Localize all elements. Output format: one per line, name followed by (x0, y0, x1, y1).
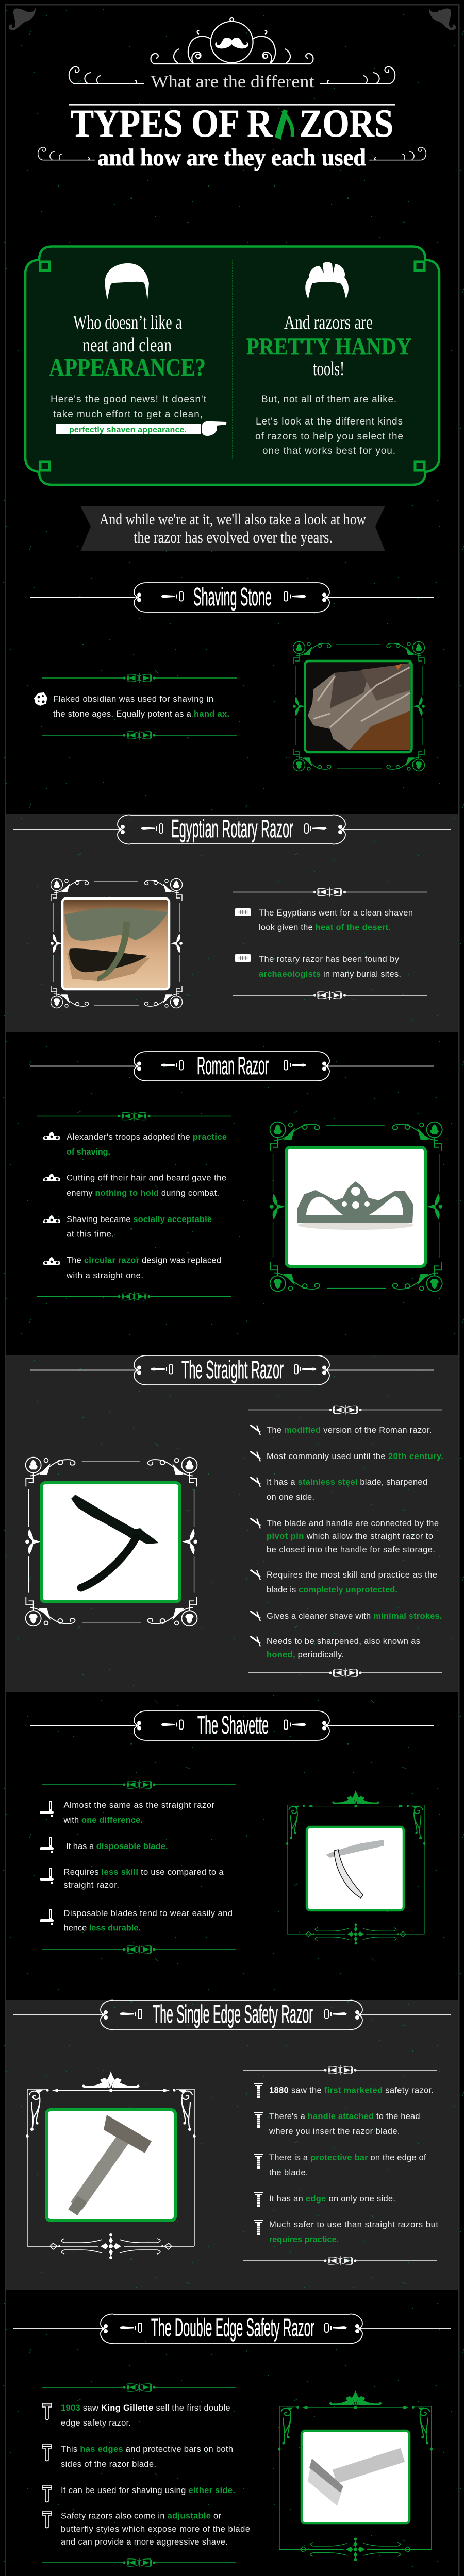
heading (30, 583, 434, 612)
icon: screw (254, 2112, 263, 2128)
banner: the razor has evolved over the years. (134, 528, 333, 546)
text panel: It has a disposable blade. (66, 1842, 168, 1851)
panel: intro (25, 246, 439, 485)
heading (13, 2314, 451, 2343)
icon: screw (254, 2220, 263, 2235)
heading: And razors are (284, 312, 373, 333)
text panel: There is a protective bar on the edge of (269, 2153, 426, 2162)
main title: ZORS (300, 102, 393, 145)
icon: roman razor (43, 1174, 60, 1181)
right column: of razors to help you select the (255, 431, 403, 442)
icon: double edge razor (42, 2403, 52, 2419)
icon: blade (235, 954, 251, 962)
text panel: be closed into the handle for safe storage. (267, 1545, 435, 1554)
text panel: The modified version of the Roman razor. (267, 1426, 432, 1435)
left column: APPEARANCE? (49, 353, 206, 381)
text panel (243, 2065, 438, 2265)
right column: tools! (313, 358, 344, 380)
section: straight razor (26, 1355, 443, 1677)
text panel: The circular razor design was replaced (67, 1256, 221, 1265)
icon: straight razor (250, 1518, 261, 1529)
section: egyptian rotary razor (13, 815, 451, 1008)
icon: straight razor (250, 1611, 261, 1621)
image: obsidian (293, 642, 425, 771)
text panel: Much safer to use than straight razors but (269, 2220, 438, 2229)
text panel: This has edges and protective bars on both (61, 2445, 233, 2454)
text panel: of shaving. (67, 1147, 110, 1157)
heading: Egyptian Rotary Razor (171, 815, 293, 843)
text panel: Safety razors also come in adjustable or (61, 2511, 222, 2520)
text panel: Alexander's troops adopted the practice (67, 1132, 227, 1142)
text panel: and can provide a more aggressive shave. (61, 2537, 228, 2547)
section: single edge safety razor (13, 2000, 451, 2265)
text panel (42, 2383, 250, 2567)
icon: straight razor (250, 1425, 261, 1435)
icon: hair (105, 263, 149, 300)
title rule (69, 104, 395, 106)
title line 1 flourishes (69, 67, 395, 84)
heading (30, 1711, 434, 1740)
icon: roman razor (43, 1257, 60, 1265)
text panel: butterfly styles which expose more of the blade (61, 2524, 250, 2534)
text panel: where you insert the razor blade. (269, 2127, 400, 2136)
text panel: requires practice. (269, 2235, 339, 2244)
icon: roman razor (43, 1215, 60, 1223)
icon: pompadour hair (305, 262, 349, 299)
text panel: It has an edge on only one side. (269, 2194, 395, 2204)
text panel: The blade and handle are connected by the (267, 1519, 439, 1528)
text panel: at this time. (67, 1229, 114, 1239)
icon: straight razor (250, 1569, 261, 1580)
main title: TYPES OF R (71, 102, 273, 145)
text panel (40, 1780, 236, 1954)
icon: straight razor (250, 1636, 261, 1647)
section: shavette (30, 1711, 434, 1954)
text panel: with a straight one. (66, 1271, 143, 1280)
image: double edge razor (278, 2390, 433, 2561)
text panel: The Egyptians went for a clean shaven (259, 908, 413, 918)
text panel: Gives a cleaner shave with minimal strokes. (267, 1612, 442, 1621)
icon: double edge razor (42, 2445, 52, 2461)
text panel: There's a handle attached to the head (269, 2112, 420, 2121)
title line 3 flourishes (38, 147, 426, 160)
text panel: Requires the most skill and practice as the (267, 1570, 437, 1580)
text panel: sides of the razor blade. (61, 2460, 156, 2469)
left column: take much effort to get a clean, (53, 409, 203, 420)
heading (30, 1355, 434, 1385)
text panel: Flaked obsidian was used for shaving in (53, 694, 213, 704)
section: double edge safety razor (13, 2314, 451, 2567)
text panel (37, 1112, 231, 1301)
text panel: the blade. (269, 2168, 308, 2177)
title line 1: What are the different (151, 73, 314, 91)
image: single edge razor (26, 2071, 196, 2259)
icon: screw (254, 2083, 263, 2098)
text panel: look given the heat of the desert. (259, 923, 391, 933)
text panel: Cutting off their hair and beard gave the (67, 1174, 226, 1183)
heading (13, 2000, 451, 2030)
text panel: on one side. (267, 1493, 314, 1502)
text panel (34, 673, 237, 740)
icon: straight razor (250, 1451, 261, 1462)
heading: Shaving Stone (193, 583, 272, 611)
body: Here's the good news! It doesn't (51, 394, 207, 405)
image: shavette (286, 1790, 425, 1944)
alternating section bands (5, 814, 459, 2576)
icon: shavette (40, 1837, 54, 1853)
text panel: straight razor. (64, 1880, 119, 1890)
body: But, not all of them are alike. (261, 394, 396, 405)
highlight (56, 424, 201, 434)
text panel: Almost the same as the straight razor (64, 1801, 214, 1810)
text panel: Disposable blades tend to wear easily and (64, 1909, 233, 1918)
text panel: archaeologists in many burial sites. (259, 970, 401, 979)
icon: blade (235, 908, 251, 916)
text panel: hence less durable. (64, 1924, 141, 1933)
icon: double edge razor (42, 2486, 52, 2502)
icon: shavette (40, 1909, 54, 1925)
text panel: blade is completely unprotected. (267, 1585, 397, 1595)
text panel: The rotary razor has been found by (259, 955, 400, 964)
right column (246, 262, 411, 456)
icon: shavette (40, 1868, 54, 1884)
icon: shavette (40, 1801, 54, 1817)
icon: double edge razor (42, 2512, 52, 2528)
heading: Roman Razor (197, 1052, 269, 1080)
heading (13, 815, 451, 844)
text panel: 1880 saw the first marketed safety razor. (269, 2086, 434, 2095)
image: bronze razor (51, 879, 183, 1008)
text panel: honed, periodically. (267, 1650, 344, 1659)
icon: roman razor (43, 1132, 60, 1140)
banner (80, 506, 385, 551)
section: roman razor (30, 1052, 442, 1301)
text panel (233, 887, 427, 1000)
text panel: It can be used for shaving using either side. (61, 2486, 235, 2495)
left column: neat and clean (82, 334, 172, 356)
text panel: It has a stainless steel blade, sharpened (267, 1478, 427, 1487)
title line 3: and how are they each used (97, 144, 366, 171)
text panel: edge safety razor. (61, 2418, 131, 2428)
text panel (248, 1405, 443, 1677)
crown ornament with mustache (151, 18, 313, 64)
heading: Who doesn’t like a (73, 312, 182, 333)
highlight: perfectly shaven appearance. (69, 426, 187, 434)
text panel: Needs to be sharpened, also known as (267, 1637, 420, 1646)
razor letter A (275, 109, 292, 140)
text panel: Most commonly used until the 20th century. (267, 1452, 443, 1461)
right column: one that works best for you. (262, 446, 395, 456)
icon: screw (254, 2154, 263, 2169)
icon: screw (254, 2192, 263, 2207)
text panel: 1903 saw King Gillette sell the first double (61, 2403, 230, 2413)
text panel: with one difference. (63, 1816, 143, 1825)
text panel: pivot pin which allow the straight razor to (267, 1532, 433, 1541)
section: shaving stone (30, 583, 434, 771)
heading: The Shavette (197, 1711, 269, 1739)
right column: PRETTY HANDY (246, 333, 411, 360)
right column: Let's look at the different kinds (256, 416, 403, 427)
title block (38, 18, 426, 171)
icon: pointing hand (202, 421, 227, 436)
corner squares (40, 262, 424, 470)
text panel: Shaving became socially acceptable (67, 1215, 212, 1224)
heading: The Straight Razor (181, 1356, 284, 1384)
banner: And while we're at it, we'll also take a look at how (100, 510, 367, 528)
icon: straight razor (250, 1477, 261, 1487)
text panel: the stone ages. Equally potent as a hand ax. (53, 709, 229, 719)
left column (49, 263, 227, 436)
heading (30, 1052, 434, 1081)
image: straight razor (26, 1458, 197, 1626)
text panel: enemy nothing to hold during combat. (67, 1189, 219, 1198)
icon: rock (34, 692, 47, 706)
text panel: Requires less skill to use compared to a (64, 1868, 224, 1877)
image: roman razor (270, 1122, 442, 1291)
